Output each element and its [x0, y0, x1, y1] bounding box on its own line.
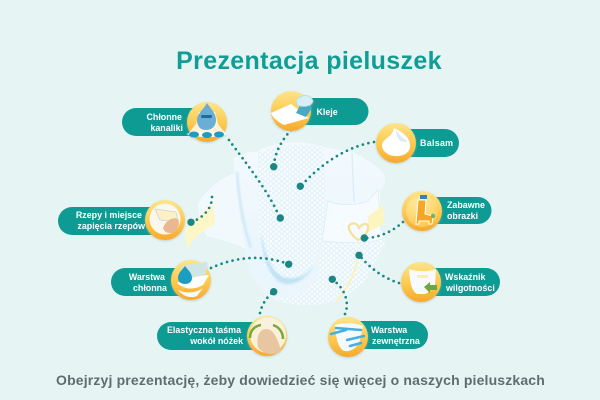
icon: outer layer	[328, 317, 368, 357]
label: kanaliki	[150, 123, 183, 133]
icon: balm swirl	[376, 123, 416, 163]
pill	[58, 207, 165, 235]
diaper: lower quilting	[271, 238, 386, 305]
title: Prezentacja pieluszek	[176, 47, 442, 75]
callout: elastyczna taśma wokół nóżek	[157, 316, 287, 356]
connector: warstwa chłonna	[211, 258, 288, 268]
label: Wskaźnik	[445, 272, 486, 282]
icon: water drop	[186, 102, 228, 142]
pill	[348, 321, 428, 349]
diaper: left wing	[197, 172, 252, 252]
pill	[157, 322, 267, 350]
connector: kleje	[274, 130, 291, 165]
label: Elastyczna taśma	[167, 325, 241, 335]
connector: wskaźnik wilgotności	[360, 256, 399, 283]
callout: balsam	[376, 123, 459, 163]
diaper: yellow tab	[368, 205, 384, 232]
caption: Obejrzyj prezentację, żeby dowiedzieć się więcej o naszych pieluszkach	[56, 372, 545, 388]
connector: rzepy	[192, 197, 212, 222]
label: chłonna	[133, 283, 167, 293]
icon: stretching finger	[247, 316, 287, 356]
pill	[396, 129, 459, 157]
callout: warstwa zewnętrzna	[328, 317, 428, 357]
pill	[422, 197, 491, 224]
icon: wetness indicator	[401, 262, 441, 302]
connector: warstwa zewnętrzna	[333, 280, 347, 314]
label: Kleje	[316, 107, 338, 117]
callout: rzepy i miejsce zapięcia rzepów	[58, 200, 185, 240]
label: wilgotności	[445, 283, 495, 293]
label: Warstwa	[129, 272, 165, 282]
callout: kleje	[271, 91, 368, 131]
diaper: central mesh	[258, 144, 326, 283]
diaper: wetness line	[336, 259, 358, 301]
diaper illustration	[185, 142, 387, 305]
diaper: left tape	[185, 204, 215, 249]
label: zapięcia rzepów	[77, 221, 145, 231]
icon: fastening tape	[145, 200, 185, 240]
callout: warstwa chłonna	[111, 260, 211, 300]
pill	[291, 98, 368, 125]
label: Zabawne	[447, 200, 485, 210]
callout: zabawne obrazki	[402, 191, 491, 231]
connector end dots	[187, 163, 368, 295]
pill	[122, 108, 200, 136]
diaper: blue core shadow	[261, 232, 314, 284]
label: zewnętrzna	[372, 336, 420, 346]
connector: balsam	[301, 142, 374, 186]
diaper: main body	[233, 142, 387, 305]
diaper: right fold	[352, 153, 354, 202]
diaper: logo	[349, 223, 368, 240]
icon: absorbent layer	[171, 260, 211, 300]
callout: chłonne kanaliki	[122, 102, 228, 142]
label: Rzepy i miejsce	[76, 210, 142, 220]
label: Warstwa	[371, 325, 407, 335]
label: obrazki	[447, 211, 478, 221]
callout: wskaźnik wilgotności	[401, 262, 500, 302]
label: Chłonne	[146, 112, 182, 122]
pill	[111, 268, 191, 296]
icon: adhesive tab	[271, 91, 313, 131]
connector: chłonne kanaliki	[229, 140, 280, 218]
icon: giraffe	[402, 191, 442, 231]
pill	[421, 268, 500, 296]
label: Balsam	[420, 138, 453, 148]
diaper: leg ruffle	[249, 262, 320, 297]
connector: elastyczna taśma	[260, 292, 273, 313]
diaper: side fold	[237, 172, 251, 248]
diaper: front panel	[322, 190, 387, 243]
connector: zabawne obrazki	[365, 222, 403, 238]
label: wokół nóżek	[189, 336, 243, 346]
